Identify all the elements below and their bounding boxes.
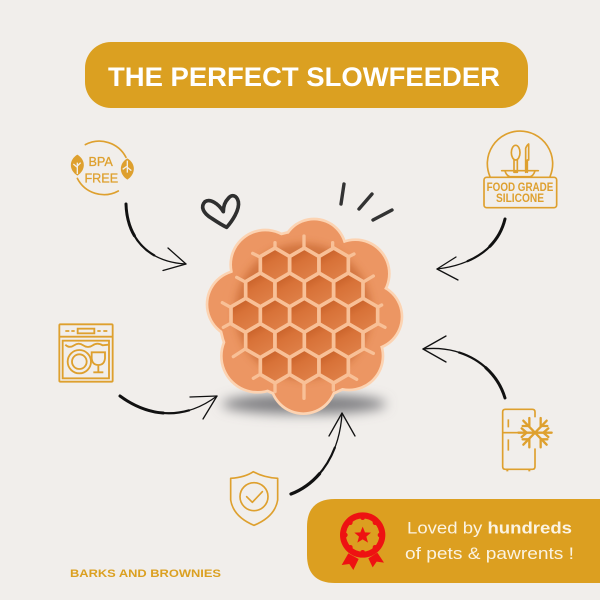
callout: loved by hundreds: Loved by hundreds [407, 518, 572, 538]
icon: red award rosette [340, 512, 385, 570]
icon: food grade silicone: SILICONE [496, 191, 544, 205]
arrow: freezer to product [423, 336, 505, 398]
callout: loved by hundreds [307, 499, 600, 583]
icon: BPA free [71, 141, 134, 195]
icon: BPA free: BPA [88, 155, 113, 169]
icon: food grade silicone [484, 131, 557, 208]
arrow: BPA free to product [126, 204, 186, 270]
icon: dishwasher safe [59, 324, 113, 382]
doodle emphasis lines [341, 184, 392, 220]
icon: doodle heart [203, 196, 239, 227]
callout: loved by hundreds: of pets & pawrents ! [405, 544, 574, 563]
brand name: BARKS AND BROWNIES [70, 568, 221, 580]
arrow: dishwasher to product [120, 396, 217, 419]
arrow: food grade silicone to product [437, 219, 505, 280]
title banner: THE PERFECT SLOWFEEDER [108, 62, 500, 92]
product: honeycomb slow feeder mat [206, 218, 403, 415]
icon: freezer safe [503, 409, 552, 471]
icon: safety shield [231, 472, 278, 525]
arrow: shield to product [291, 413, 355, 494]
icon: food grade silicone: FOOD GRADE [487, 180, 553, 194]
icon: BPA free: FREE [84, 171, 118, 185]
title banner [85, 42, 528, 108]
